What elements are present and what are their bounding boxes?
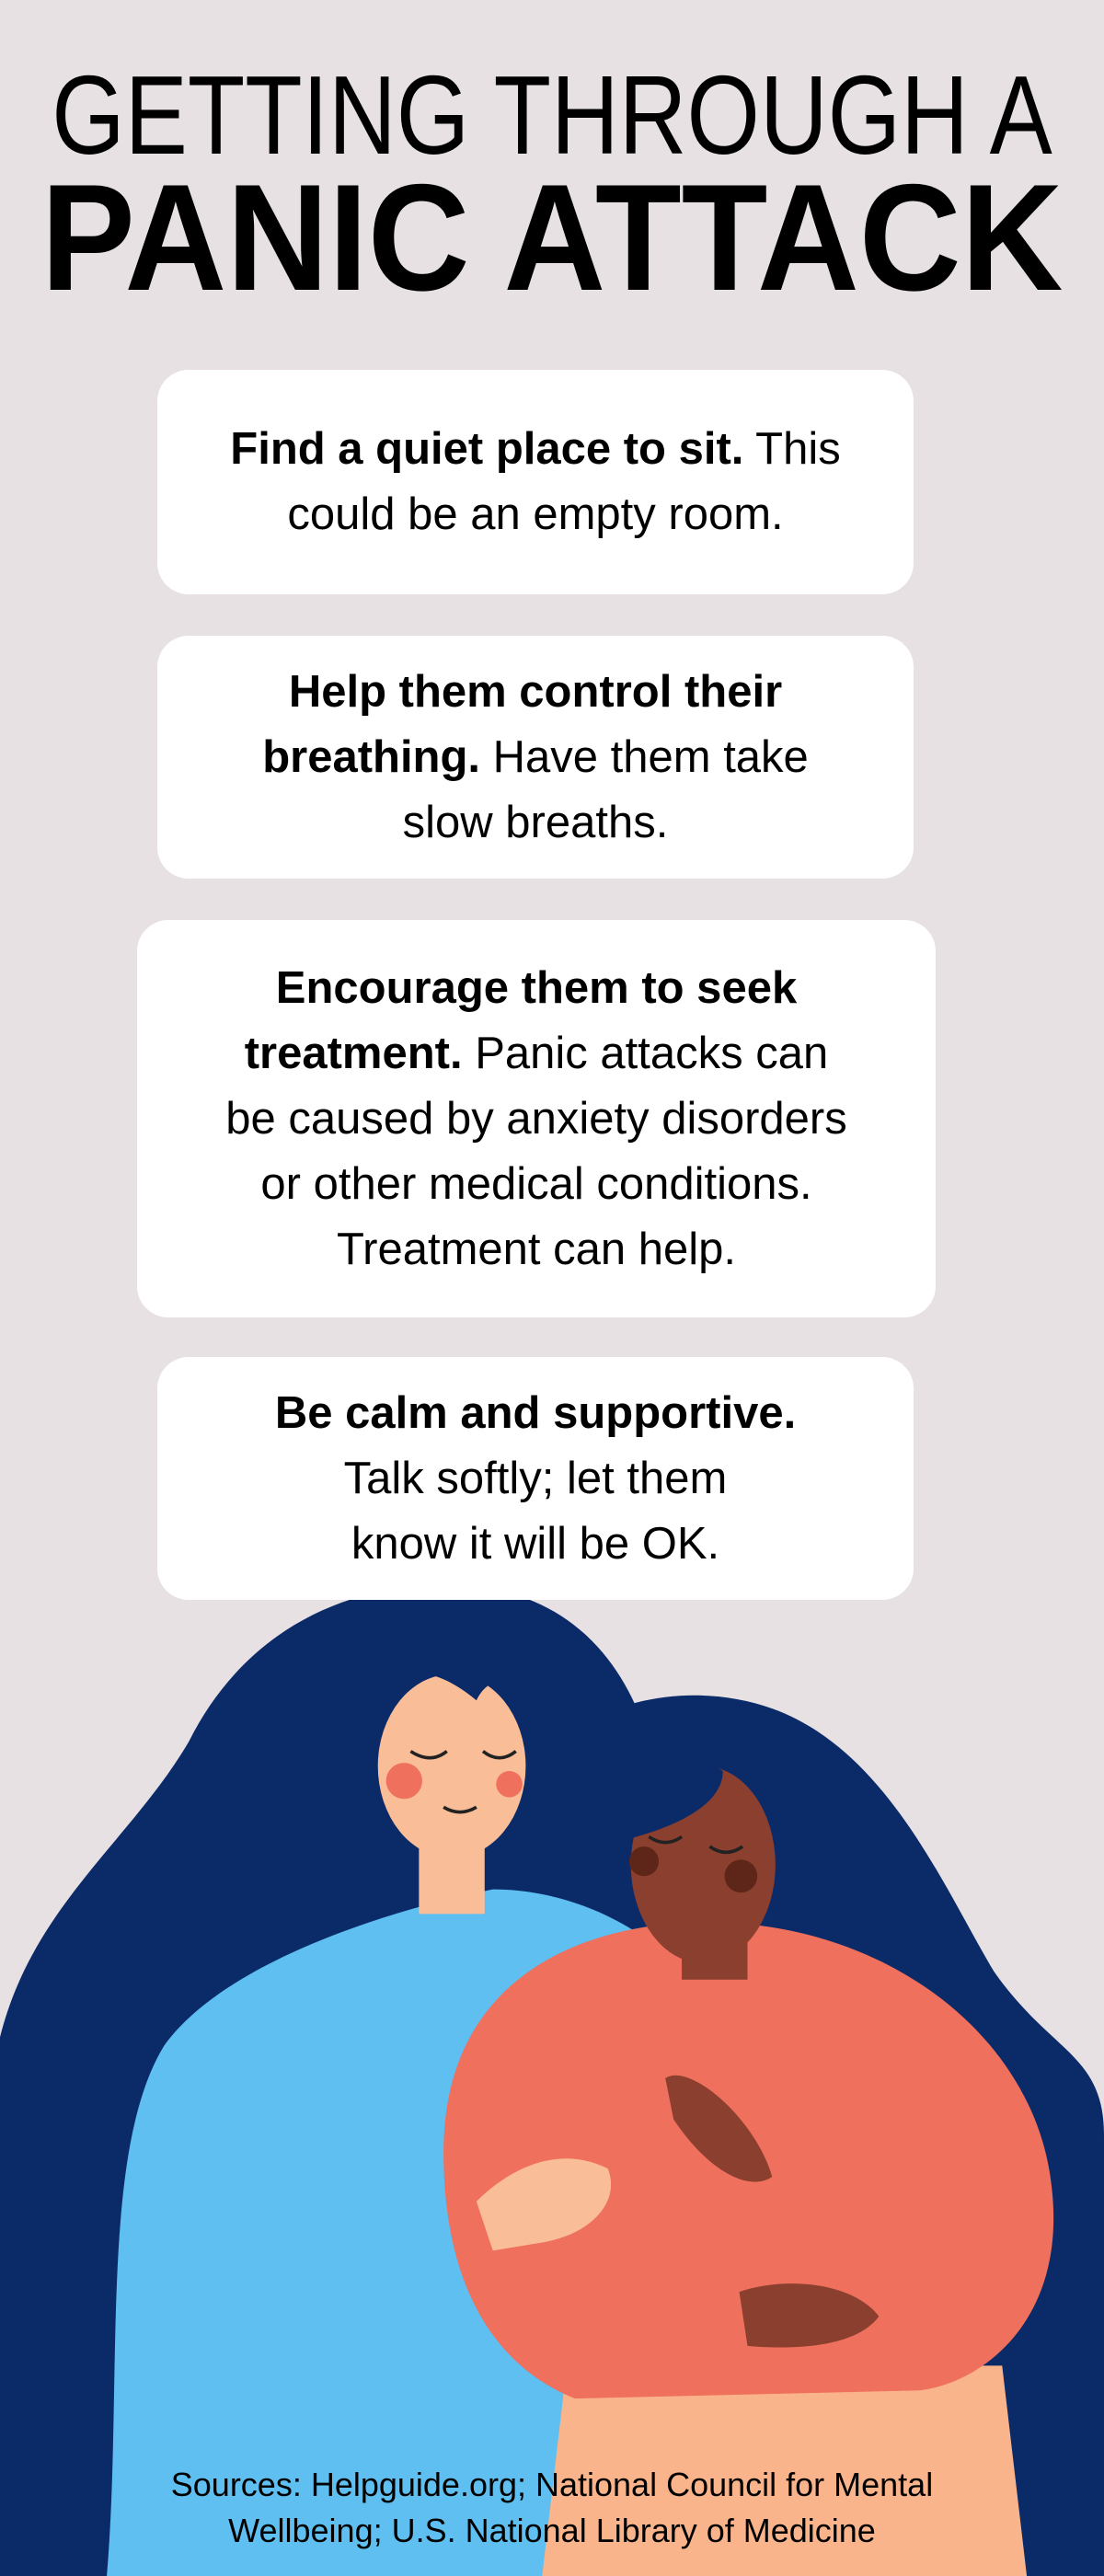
sources: Wellbeing; U.S. National Library of Medicine xyxy=(228,2512,876,2549)
panel: treatment: be caused by anxiety disorders xyxy=(225,1093,847,1143)
panel: quiet place xyxy=(157,370,914,594)
left woman body xyxy=(107,1890,665,2576)
left woman hair xyxy=(0,1585,690,2576)
panel: calm: Be calm and supportive. xyxy=(275,1387,796,1437)
hands xyxy=(477,2076,879,2348)
panel: calm: know it will be OK. xyxy=(351,1518,719,1568)
sources xyxy=(171,2466,933,2549)
panel: quiet place: Find a quiet place to sit. This xyxy=(230,424,841,474)
panel: treatment: or other medical conditions. xyxy=(260,1159,812,1209)
panel: treatment: treatment. Panic attacks can xyxy=(245,1029,828,1078)
panel: breathing: slow breaths. xyxy=(403,797,668,846)
panel: calm: Talk softly; let them xyxy=(344,1454,727,1503)
right woman body xyxy=(443,1922,1053,2398)
panel: treatment: Encourage them to seek xyxy=(276,962,797,1012)
title xyxy=(41,52,1063,322)
left woman neck and face xyxy=(374,1631,534,1914)
right woman skirt xyxy=(542,2365,1027,2576)
panel: breathing: breathing. Have them take xyxy=(262,732,809,782)
sources: Sources: Helpguide.org; National Council for Mental xyxy=(171,2466,933,2503)
right woman neck and face xyxy=(625,1765,776,1980)
panel: calm xyxy=(157,1357,914,1600)
panel: breathing: Help them control their xyxy=(289,666,782,716)
panel: breathing xyxy=(157,636,914,879)
title: GETTING THROUGH A xyxy=(52,52,1052,178)
title: PANIC ATTACK xyxy=(41,153,1063,322)
right woman hair xyxy=(542,1696,1104,2576)
panel: treatment: Treatment can help. xyxy=(337,1224,736,1273)
panel: quiet place: could be an empty room. xyxy=(287,489,784,539)
panel: treatment xyxy=(137,920,936,1317)
